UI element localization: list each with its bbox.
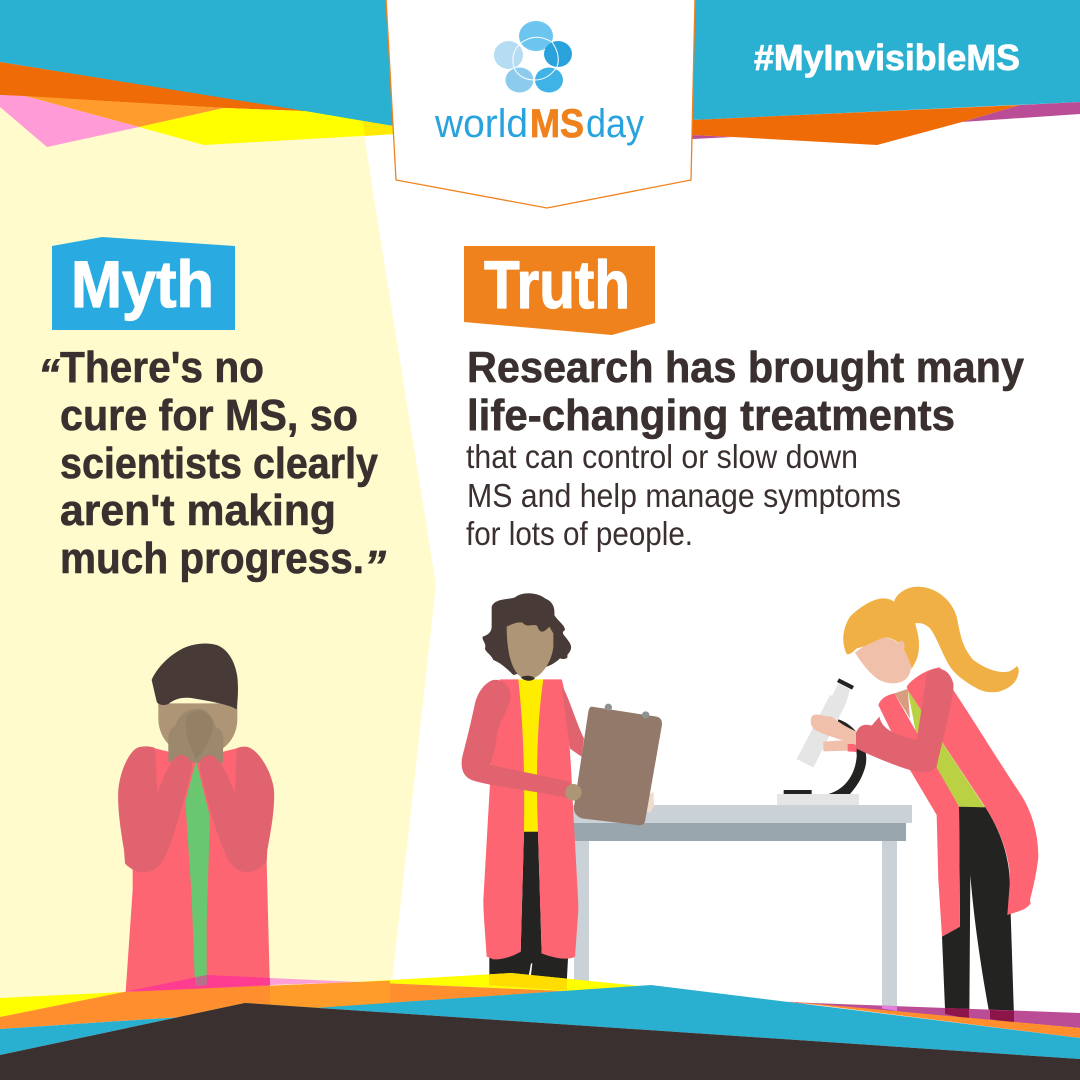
logo panel [386, 0, 695, 208]
truth body text: that can control or slow down [466, 438, 858, 475]
truth body text: MS and help manage symptoms [467, 477, 901, 514]
figure: myth person covering face [118, 643, 274, 992]
hashtag: #MyInvisibleMS [754, 37, 1020, 78]
logo wordmark: MS [530, 102, 584, 146]
logo wordmark: day [586, 102, 644, 146]
truth body text [466, 438, 901, 552]
truth heading: Research has brought many [467, 343, 1024, 392]
lab table [573, 805, 912, 1011]
figure: scientist at microscope [777, 587, 1038, 1017]
logo icon: five overlapping circles [494, 21, 572, 92]
top left banner [0, 0, 394, 147]
myth quote [38, 343, 386, 591]
truth body text: for lots of people. [466, 515, 693, 552]
panel: myth background [0, 100, 436, 1020]
bottom colour band [0, 973, 1080, 1080]
myth quote: scientists clearly [60, 439, 378, 488]
top right banner [692, 0, 1080, 145]
truth tag: Truth [484, 247, 630, 323]
myth quote: much progress. [60, 534, 364, 583]
myth tag [52, 237, 235, 330]
logo wordmark: world [434, 102, 528, 146]
myth quote: “ [38, 350, 60, 399]
myth quote: ” [364, 542, 386, 591]
figure: scientist with clipboard [462, 593, 662, 983]
myth quote: There's no [60, 343, 264, 392]
myth quote: cure for MS, so [60, 391, 358, 440]
truth heading: life-changing treatments [467, 391, 955, 440]
microscope [777, 678, 866, 805]
truth heading [467, 343, 1024, 440]
myth quote: aren't making [60, 486, 336, 535]
myth tag: Myth [71, 247, 214, 321]
